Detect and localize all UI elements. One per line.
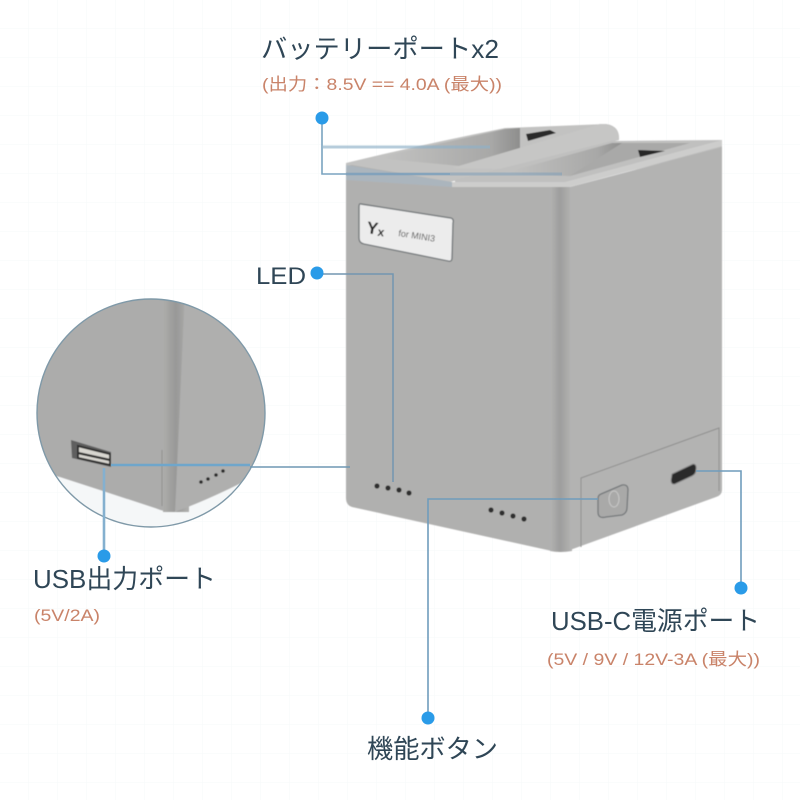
logo: x — [377, 225, 386, 240]
spec: (5V/2A) — [34, 606, 100, 625]
second LED dots — [488, 507, 527, 522]
front battery slot — [452, 140, 722, 188]
USB-A port — [71, 440, 111, 467]
spec: (出力：8.5V == 4.0A (最大)) — [262, 75, 502, 94]
side panel outline — [581, 428, 719, 547]
callout: USB-C power port — [547, 471, 760, 669]
label text: for MINI3 — [398, 228, 436, 244]
brand label — [359, 204, 453, 261]
heading: バッテリーポートx2 — [261, 34, 499, 64]
charging hub device — [346, 124, 722, 552]
function button — [598, 485, 628, 517]
heading: USB出力ポート — [33, 564, 216, 594]
callout: USB output — [33, 465, 350, 625]
battery slot connector — [346, 165, 452, 187]
USB-C port — [671, 464, 696, 484]
callout: LED — [256, 263, 393, 482]
logo: Y — [365, 218, 379, 239]
callout: battery port — [261, 34, 562, 174]
heading: USB-C電源ポート — [551, 606, 760, 636]
body corner — [550, 187, 572, 552]
lens panel seam — [161, 450, 163, 506]
lens LED dots — [199, 469, 225, 484]
heading: LED — [256, 263, 306, 290]
lens right face — [175, 306, 264, 512]
body front face — [346, 165, 552, 551]
spec: (5V / 9V / 12V-3A (最大)) — [547, 650, 760, 669]
magnified lens — [30, 290, 270, 527]
lens corner — [163, 290, 189, 512]
front LED dots — [374, 483, 412, 496]
heading: 機能ボタン — [367, 734, 498, 764]
lens left face — [38, 300, 164, 511]
callout: function button — [367, 499, 598, 764]
body right face — [570, 147, 722, 550]
rear battery slot — [346, 124, 619, 182]
